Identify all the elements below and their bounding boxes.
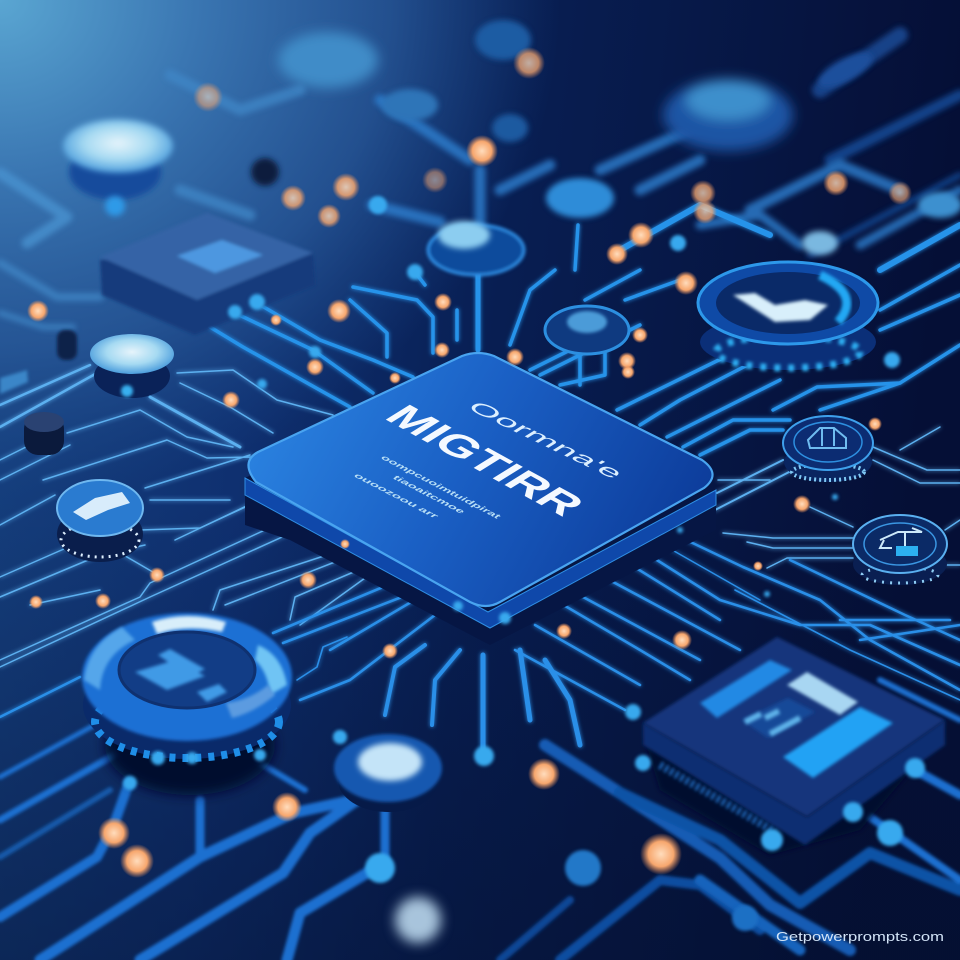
chip subtitle: Oormna'e [462, 398, 629, 482]
icon: large ring bottom left [82, 613, 292, 795]
chip small text [351, 454, 504, 520]
bottom wide traces [0, 680, 960, 960]
chip side [245, 364, 716, 645]
icon: bottom disc [334, 734, 442, 812]
icon: top right disc blurred [663, 79, 793, 151]
icon: large gear right [698, 262, 878, 370]
orange indicator dots [27, 47, 912, 878]
icon: disc upper right of chip [545, 178, 629, 354]
icon: left badge [57, 480, 143, 562]
icon: small disc center top [428, 221, 524, 275]
panel: central microchip [245, 353, 716, 645]
icon: top disc blurred [278, 32, 378, 88]
thin left and right traces [0, 365, 960, 667]
panel: lower right module [643, 637, 945, 855]
blurred far traces [0, 35, 960, 327]
chip small text: oompcuoimtuidpirat [378, 454, 504, 520]
trace junction nodes [123, 196, 925, 931]
lower right traces [0, 537, 960, 755]
icon: top left lens [63, 119, 173, 216]
icon: right badge [783, 416, 873, 482]
chip top face [248, 353, 713, 606]
upper circuit traces [210, 205, 960, 455]
blurred white light [395, 897, 441, 943]
icon: dark cylinder [24, 330, 77, 455]
icon: top small blurred discs [251, 20, 960, 255]
light pad on left [0, 370, 28, 394]
icon: left small lens [90, 334, 174, 398]
panel: left circuit module [100, 213, 315, 335]
icon: far right badge [853, 515, 947, 585]
watermark: Getpowerprompts.com [776, 929, 944, 944]
chip title: MIGTIRR [375, 398, 595, 522]
chip small text: ouoozoou arr [351, 472, 442, 520]
chip small text: tiaoaitcmoe [390, 474, 468, 515]
